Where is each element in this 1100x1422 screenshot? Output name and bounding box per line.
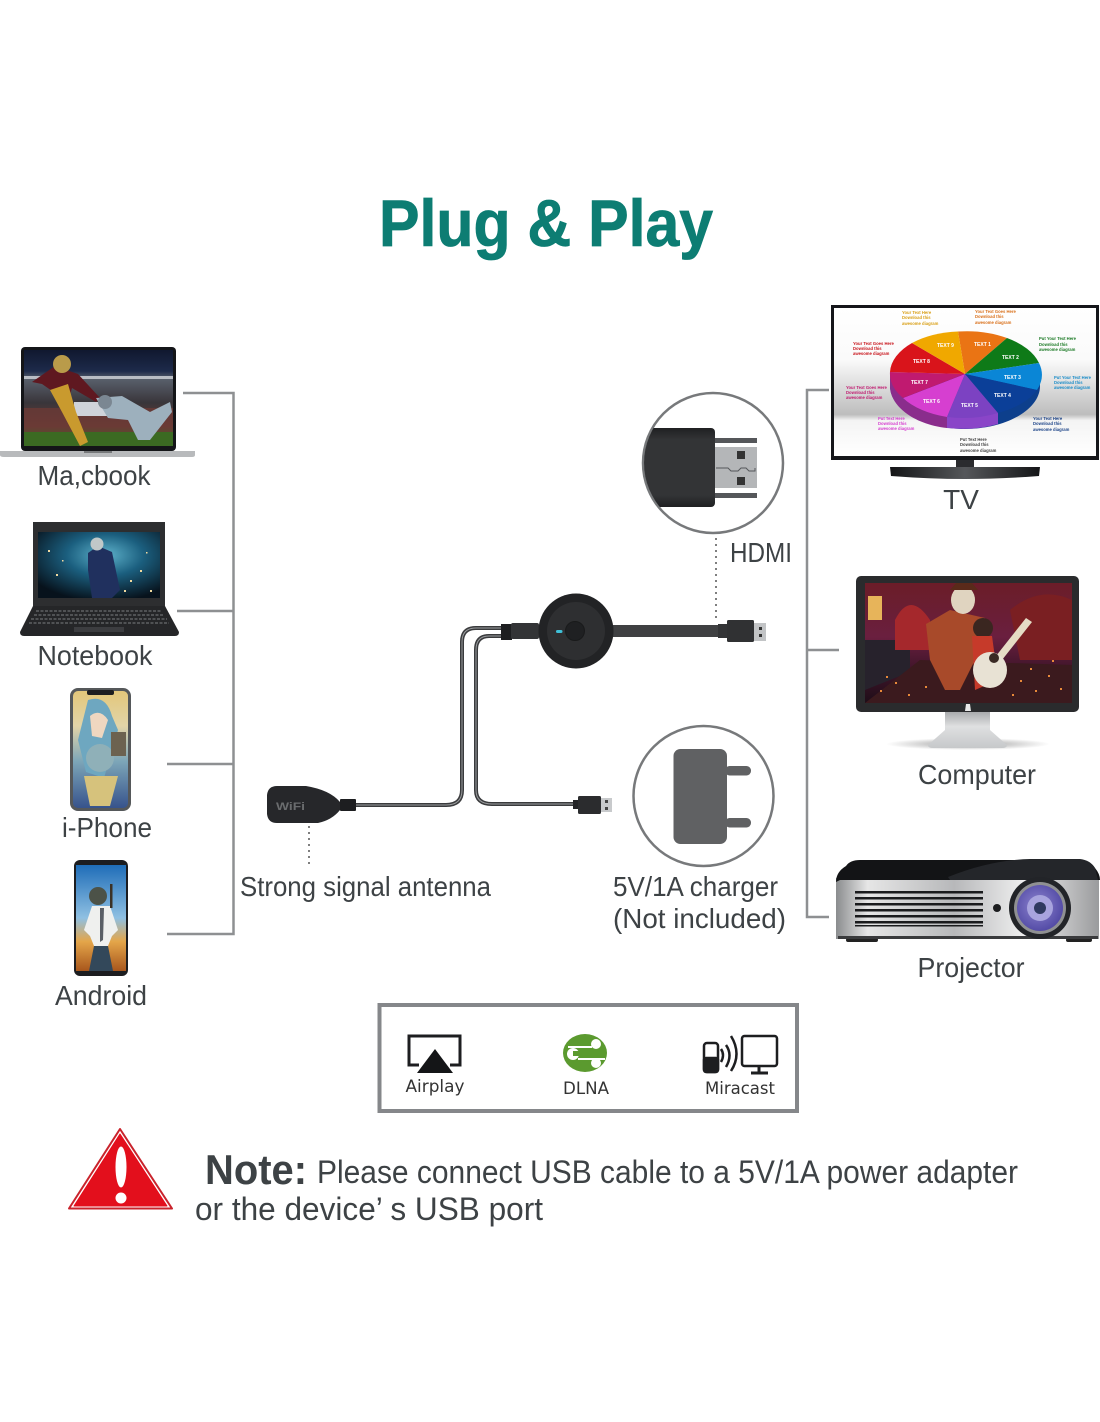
label: charger: 5V/1A charger: [613, 871, 778, 902]
label: DLNA: DLNA: [563, 1079, 609, 1099]
pie labels: TEXT 2: [1002, 355, 1019, 361]
callout: HDMI plug circle: [640, 393, 783, 533]
TV captions: awesome diagram: [902, 321, 939, 326]
label: iPhone: i-Phone: [62, 812, 152, 843]
label: TV: TV: [943, 484, 979, 515]
pie labels: TEXT 7: [911, 380, 928, 386]
label: Projector: Projector: [918, 952, 1024, 983]
callout: charger circle: [634, 726, 774, 866]
TV captions: Download this: [846, 390, 875, 395]
TV captions: Put Text Here: [878, 416, 905, 421]
TV captions: awesome diagram: [960, 448, 997, 453]
TV captions: [846, 309, 1092, 453]
TV captions: Download this: [878, 421, 907, 426]
label: charger: (Not included): [613, 903, 786, 934]
dongle with cables: [267, 594, 766, 823]
bracket: display devices: [807, 390, 839, 917]
pie labels: TEXT 4: [994, 393, 1011, 399]
note text: Please connect USB cable to a 5V/1A power adapter: [317, 1154, 1018, 1190]
TV captions: Download this: [853, 346, 882, 351]
leader: HDMI: [715, 538, 717, 622]
TV captions: Put Your Text Here: [1054, 375, 1092, 380]
TV captions: awesome diagram: [853, 351, 890, 356]
label: Macbook: Ma,cbook: [38, 460, 151, 491]
TV captions: Download this: [1033, 421, 1062, 426]
label: Computer: Computer: [918, 759, 1036, 790]
label: HDMI: HDMI: [730, 537, 792, 568]
pie labels: TEXT 1: [974, 342, 991, 348]
TV captions: awesome diagram: [1039, 347, 1076, 352]
leader: antenna: [308, 826, 310, 866]
TV captions: Put Your Text Here: [1039, 336, 1077, 341]
device: Notebook: [20, 522, 179, 636]
icon: DLNA: [563, 1034, 607, 1072]
TV captions: Your Text Here: [902, 310, 932, 315]
pie side: [890, 374, 1040, 429]
pie labels: TEXT 3: [1004, 375, 1021, 381]
TV captions: Your Text Goes Here: [975, 309, 1016, 314]
device: Macbook: [0, 347, 195, 457]
TV captions: Your Text Here: [1033, 416, 1063, 421]
TV captions: Your Text Goes Here: [853, 341, 894, 346]
bracket: source devices: [167, 393, 234, 934]
TV captions: awesome diagram: [1054, 385, 1091, 390]
device: Projector: [836, 859, 1100, 942]
title: Plug & Play: [379, 186, 713, 260]
TV captions: Download this: [960, 442, 989, 447]
TV captions: Download this: [1054, 380, 1083, 385]
icon: warning triangle: [69, 1129, 172, 1208]
TV captions: Put Text Here: [960, 437, 987, 442]
TV captions: Download this: [902, 315, 931, 320]
TV captions: Download this: [975, 314, 1004, 319]
label: antenna: Strong signal antenna: [240, 871, 491, 902]
label: charger: [613, 871, 786, 934]
pie labels: TEXT 5: [961, 403, 978, 409]
device: Computer: [856, 576, 1079, 750]
note text: Note:: [205, 1146, 307, 1193]
wifi mark: WiFi: [276, 801, 305, 813]
note text: [195, 1146, 1018, 1227]
pie labels: TEXT 8: [913, 359, 930, 365]
TV captions: Download this: [1039, 342, 1068, 347]
pie labels: TEXT 6: [923, 399, 940, 405]
icon: Airplay: [409, 1036, 460, 1073]
pie labels: TEXT 9: [937, 343, 954, 349]
label: Notebook: Notebook: [38, 640, 153, 671]
panel: protocols: [380, 1005, 797, 1111]
device: TV: [831, 305, 1099, 479]
TV captions: awesome diagram: [1033, 427, 1070, 432]
pie slices: [958, 331, 1007, 374]
TV captions: awesome diagram: [975, 320, 1012, 325]
label: Airplay: Airplay: [406, 1077, 464, 1097]
device: iPhone: [70, 688, 131, 811]
icon: Miracast: [704, 1036, 777, 1073]
TV captions: Your Text Goes Here: [846, 385, 887, 390]
TV captions: awesome diagram: [846, 395, 883, 400]
note text: or the device’ s USB port: [195, 1191, 543, 1227]
label: Miracast: Miracast: [705, 1079, 775, 1099]
label: Android: Android: [55, 980, 147, 1011]
pie labels: [911, 342, 1021, 409]
TV captions: awesome diagram: [878, 426, 915, 431]
device: Android: [74, 860, 128, 976]
